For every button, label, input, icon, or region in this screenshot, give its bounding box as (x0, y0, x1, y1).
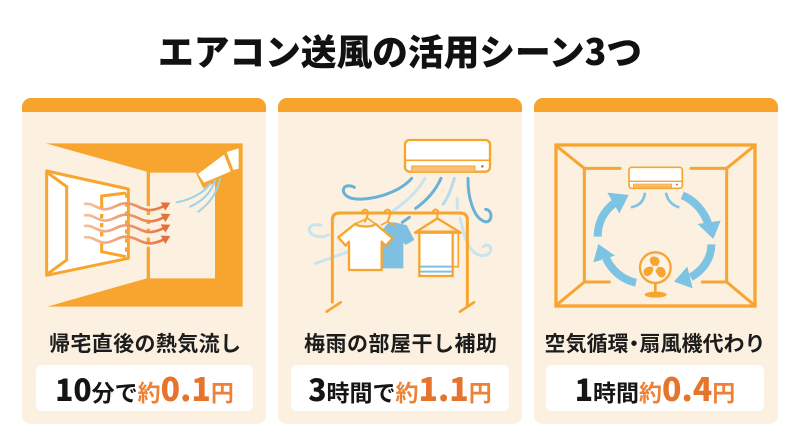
card header band (22, 98, 266, 112)
heading: 空気循環・扇風機代わり (544, 328, 766, 358)
panel: 帰宅直後の熱気流し (22, 98, 266, 424)
illustration: air circulation with fan (556, 145, 755, 306)
value text: 3時間で約1.1円 (308, 365, 492, 411)
card header band (534, 98, 778, 112)
card background (278, 98, 522, 424)
value box (546, 365, 764, 411)
title: エアコン送風の活用シーン3つ (158, 24, 642, 76)
heading: 梅雨の部屋干し補助 (304, 328, 497, 358)
panel: 空気循環・扇風機代わり (534, 98, 778, 424)
heading: 帰宅直後の熱気流し (49, 328, 241, 358)
value text: 1時間約0.4円 (575, 365, 735, 411)
illustration: hot air leaving room (46, 143, 243, 307)
illustration: laundry on rack under air conditioner (309, 140, 491, 312)
panel: 梅雨の部屋干し補助 (278, 98, 522, 424)
card header band (278, 98, 522, 112)
card background (22, 98, 266, 424)
value box (36, 365, 253, 411)
card background (534, 98, 778, 424)
value box (291, 365, 509, 411)
value text: 10分で約0.1円 (55, 365, 234, 411)
